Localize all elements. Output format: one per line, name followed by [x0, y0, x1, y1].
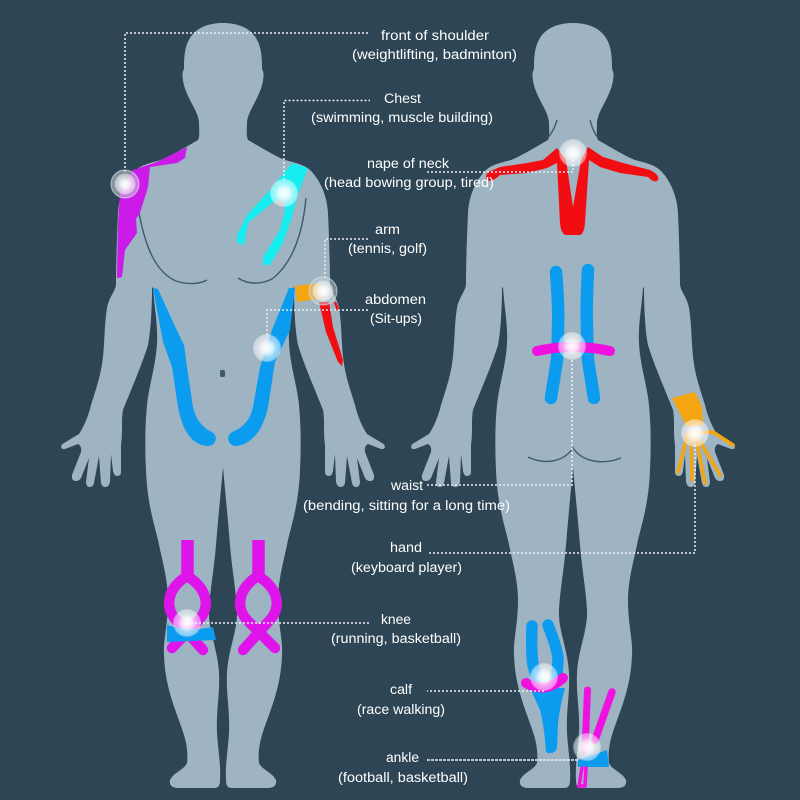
tape: knee band — [167, 625, 216, 642]
marker: abdomen — [253, 334, 281, 362]
label: knee: knee — [381, 612, 411, 627]
marker: hand — [681, 419, 709, 447]
tape: front of shoulder — [117, 147, 187, 278]
marker: waist — [558, 332, 586, 360]
label: calf — [357, 682, 445, 717]
label: calf: (race walking) — [357, 702, 445, 717]
label: knee: (running, basketball) — [331, 631, 461, 646]
tape: chest — [237, 163, 308, 265]
label: chest: (swimming, muscle building) — [311, 110, 493, 125]
back body figure — [411, 23, 735, 788]
label: arm: (tennis, golf) — [348, 241, 427, 256]
label: front of shoulder: front of shoulder — [381, 28, 490, 43]
label: ankle: ankle — [386, 750, 419, 765]
label: abdomen: abdomen — [365, 292, 426, 307]
marker: nape of neck — [559, 139, 587, 167]
label: nape of neck: (head bowing group, tired) — [324, 175, 494, 190]
label: ankle — [338, 750, 468, 785]
tape: arm — [295, 283, 343, 366]
tape: ankle — [578, 690, 612, 786]
tape: abdomen — [153, 288, 295, 446]
label: abdomen: (Sit-ups) — [370, 311, 422, 326]
label: hand: hand — [390, 540, 422, 555]
front body figure — [61, 23, 385, 788]
marker: front of shoulder — [111, 170, 139, 198]
marker: ankle — [573, 733, 601, 761]
marker: calf — [530, 663, 558, 691]
label: front of shoulder: (weightlifting, badminton) — [352, 47, 517, 62]
label: knee — [331, 612, 461, 646]
label: nape of neck: nape of neck — [367, 156, 449, 171]
label: hand: (keyboard player) — [351, 560, 462, 575]
tape: nape of neck — [486, 147, 658, 235]
tape: lower back strips — [551, 270, 594, 398]
label: waist: (bending, sitting for a long time) — [303, 498, 510, 513]
label: chest: Chest — [384, 91, 421, 106]
label: ankle: (football, basketball) — [338, 770, 468, 785]
tape: calf — [526, 625, 565, 753]
label: waist: waist — [390, 478, 423, 493]
label: chest — [311, 91, 493, 125]
front body contour lines — [139, 198, 306, 377]
label: hand — [351, 540, 462, 575]
label: nape of neck — [324, 156, 494, 190]
leader lines — [125, 33, 695, 760]
tape: knees — [169, 540, 277, 650]
tape: waist — [537, 347, 610, 351]
label: abdomen — [365, 292, 426, 326]
marker: knee — [173, 609, 201, 637]
marker: chest — [270, 179, 298, 207]
label: calf: calf — [390, 682, 412, 697]
label: waist — [303, 478, 510, 513]
back body contour lines — [528, 120, 621, 462]
tape: hand — [672, 392, 733, 483]
marker: arm — [309, 277, 337, 305]
label: arm — [348, 222, 427, 256]
label: arm: arm — [375, 222, 400, 237]
label: front of shoulder — [352, 28, 517, 62]
